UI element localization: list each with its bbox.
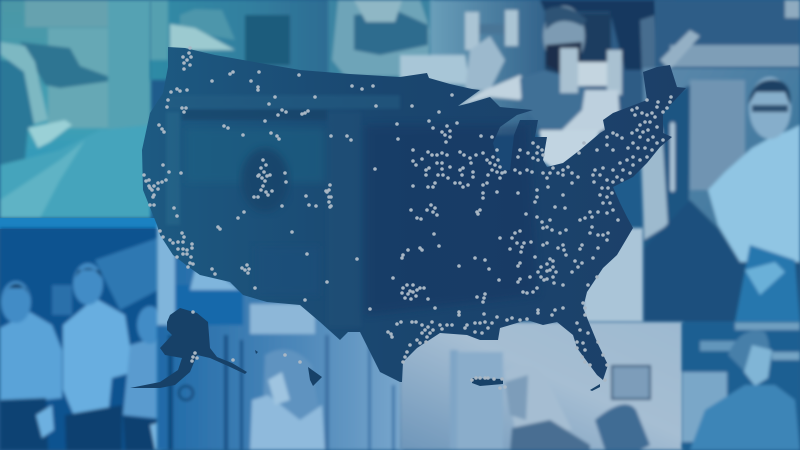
map: contiguous United States — [142, 47, 686, 382]
map: Alaska — [130, 308, 247, 388]
photo panel: warehouse ceiling, top right — [655, 0, 800, 75]
photo panel: bright blue strip — [0, 218, 158, 229]
photo panel: forklift driver — [640, 68, 800, 322]
photo panel: woodworker girl at tool wall — [157, 225, 402, 450]
shape: US mainland — [142, 47, 686, 382]
map: Puerto Rico — [472, 378, 503, 386]
photo panel: gym athlete with dumbbells — [400, 0, 675, 170]
map: Hawaii — [255, 350, 322, 386]
photo panel: shop worker, top left — [0, 0, 151, 218]
photo panel: woman at office desk — [400, 322, 683, 450]
photo texture inside the map — [168, 96, 518, 310]
photo panel: woman in plaid shirt — [328, 0, 433, 80]
location dots — [144, 48, 671, 388]
photo panel: workshop, top middle — [150, 0, 332, 80]
photo panel: young woman in sweatshirt — [682, 322, 800, 450]
photo panel: Carolina coast light area — [583, 228, 643, 322]
map: Florida Keys — [590, 384, 600, 391]
photo panel: three staff members in warehouse — [0, 228, 172, 450]
